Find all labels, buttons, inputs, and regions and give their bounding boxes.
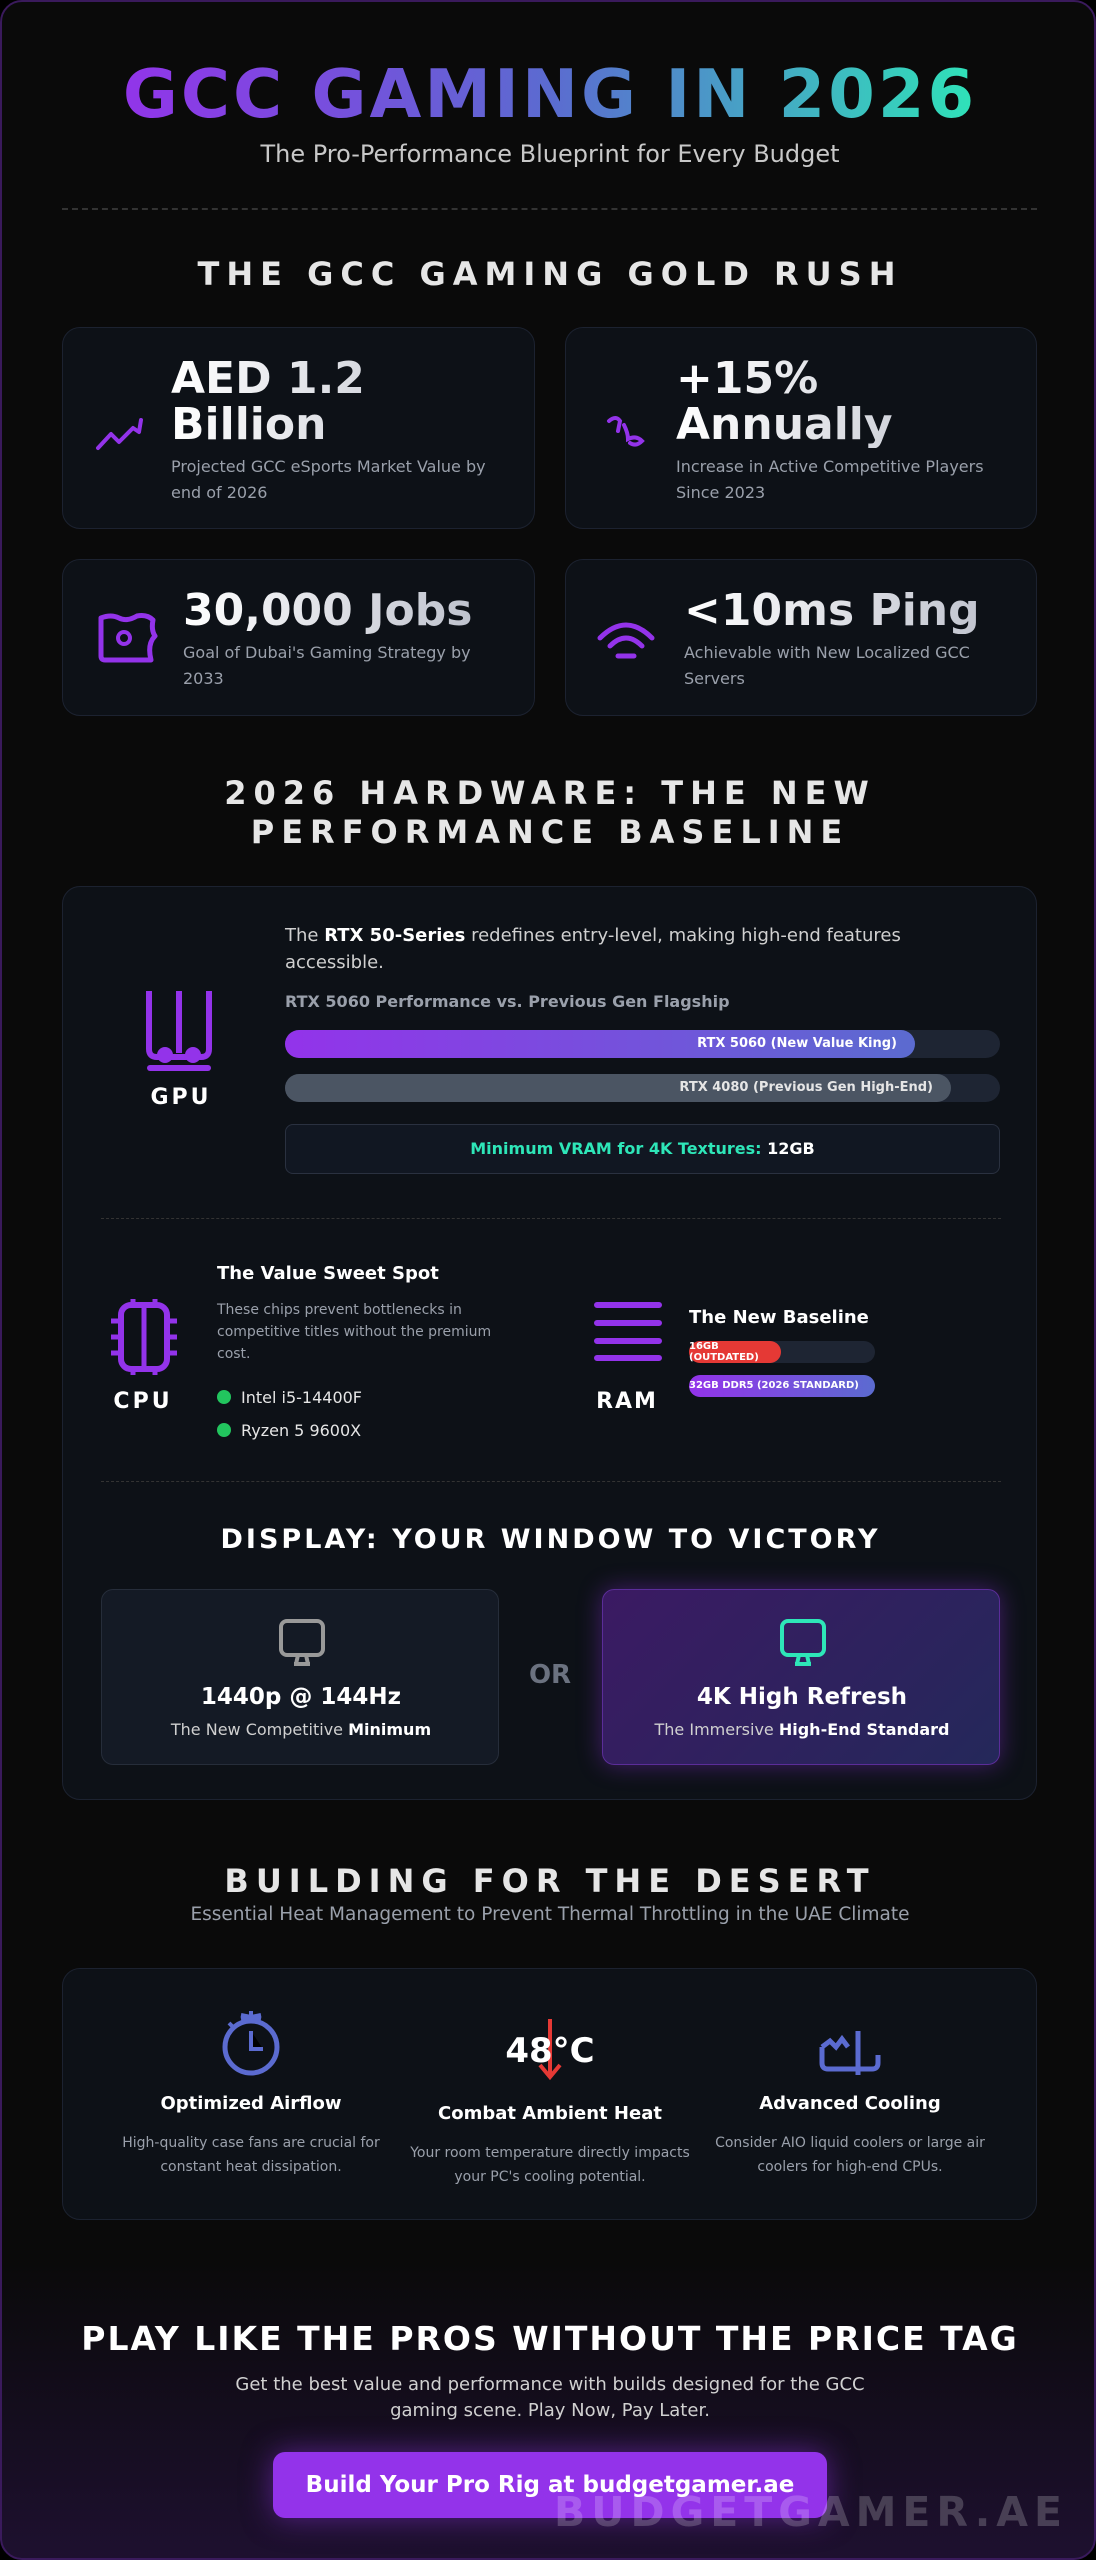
intro text: The RTX 50-Series redefines entry-level, making high-end features accessible. <box>285 925 901 973</box>
stat text: Achievable with New Localized GCC Servers <box>684 643 970 688</box>
stat text: Increase in Active Competitive Players Since 2023 <box>676 457 984 502</box>
CTA text: Get the best value and performance with builds designed for the GCC gaming scene. Play Now, Pay Later. <box>235 2374 865 2421</box>
stat text: Goal of Dubai's Gaming Strategy by 2033 <box>183 643 471 688</box>
display card: 1440p: 1440p @ 144Hz <box>201 1684 401 1710</box>
stat card: jobs <box>62 559 535 716</box>
cpu title: The Value Sweet Spot <box>217 1263 439 1284</box>
stat text <box>684 585 980 688</box>
bar chart <box>285 1030 1000 1102</box>
icon: trend <box>96 418 143 450</box>
subtitle: desert: Essential Heat Management to Prevent Thermal Throttling in the UAE Climate <box>190 1904 910 1925</box>
icon: wifi <box>598 622 654 658</box>
heading: gold rush: THE GCC GAMING GOLD RUSH <box>198 255 902 293</box>
icon: timer fan <box>222 2011 280 2076</box>
display card: 4K <box>602 1589 1000 1765</box>
RAM block <box>594 1302 875 1414</box>
icon: monitor <box>279 1619 325 1666</box>
icon: map <box>98 613 158 662</box>
icon: monitor teal <box>780 1619 826 1666</box>
bar chart: RTX 5060 (New Value King) <box>697 1036 897 1051</box>
stat card: market value <box>62 327 535 529</box>
col: airflow: High-quality case fans are crucial for constant heat dissipation. <box>122 2135 380 2175</box>
icon: growth <box>606 416 645 447</box>
display card: 1440p: The New Competitive Minimum <box>171 1720 431 1739</box>
col: cooling: Advanced Cooling <box>759 2093 941 2114</box>
cpu list: Intel i5-14400F <box>241 1388 362 1407</box>
ram bars: 32GB DDR5 (2026 STANDARD) <box>689 1380 859 1391</box>
icon: gpu <box>146 991 212 1071</box>
panel: cooling <box>62 1968 1037 2220</box>
ram bars: 16GB <box>689 1341 719 1352</box>
label RAM: RAM <box>596 1389 658 1414</box>
stat text: Projected GCC eSports Market Value by end of 2026 <box>171 457 486 502</box>
col: ambient <box>410 2019 690 2185</box>
display card: 4K: The Immersive High-End Standard <box>654 1720 950 1739</box>
col: airflow: Optimized Airflow <box>160 2093 342 2114</box>
ram bars: (OUTDATED) <box>689 1352 759 1363</box>
cpu list: Ryzen 5 9600X <box>241 1421 361 1440</box>
heading: hardware: PERFORMANCE BASELINE <box>251 813 849 851</box>
CTA heading: PLAY LIKE THE PROS WITHOUT THE PRICE TAG <box>81 2319 1019 2358</box>
icon: ram <box>594 1302 662 1361</box>
icon: liquid cooler <box>820 2031 880 2075</box>
heading: hardware: 2026 HARDWARE: THE NEW <box>224 774 876 812</box>
CTA button: Build Your Pro Rig at budgetgamer.ae <box>306 2472 794 2498</box>
col: ambient: Your room temperature directly impacts your PC's cooling potential. <box>410 2145 690 2185</box>
heading: hardware <box>224 774 876 851</box>
ram bars <box>689 1341 875 1397</box>
stat text: <10ms Ping <box>684 585 980 636</box>
stat card: players <box>565 327 1037 529</box>
stat text: Billion <box>171 399 326 450</box>
heading: display: DISPLAY: YOUR WINDOW TO VICTORY <box>220 1524 880 1555</box>
stat card: ping <box>565 559 1037 716</box>
col: airflow <box>122 2011 380 2175</box>
panel: hardware <box>62 886 1037 1800</box>
display card: 1440p <box>101 1589 499 1765</box>
chart subheading: RTX 5060 Performance vs. Previous Gen Flagship <box>285 992 730 1011</box>
CTA button <box>273 2452 827 2518</box>
VRAM callout: Minimum VRAM for 4K Textures: 12GB <box>470 1139 815 1158</box>
subtitle: The Pro-Performance Blueprint for Every Budget <box>260 140 840 168</box>
icon: cpu <box>111 1299 177 1375</box>
stat text <box>183 585 472 688</box>
cpu list <box>217 1388 362 1440</box>
stat text: 30,000 Jobs <box>183 585 472 636</box>
stat text <box>171 353 486 502</box>
ram title: The New Baseline <box>689 1307 869 1328</box>
col: cooling: Consider AIO liquid coolers or large air coolers for high-end CPUs. <box>715 2135 985 2175</box>
col: cooling <box>715 2031 985 2175</box>
label CPU: CPU <box>113 1389 173 1414</box>
stat text: AED 1.2 <box>171 353 365 404</box>
bar chart: RTX 4080 (Previous Gen High-End) <box>679 1080 933 1095</box>
icon: temperature arrow <box>505 2019 595 2080</box>
OR label: OR <box>529 1660 571 1690</box>
stat text: Annually <box>676 399 893 450</box>
title: GCC GAMING IN 2026 <box>123 55 977 133</box>
CPU block <box>111 1263 491 1440</box>
label GPU: GPU <box>150 1085 212 1110</box>
col: ambient: Combat Ambient Heat <box>438 2103 662 2124</box>
cpu desc: These chips prevent bottlenecks in competitive titles without the premium cost. <box>217 1302 491 1362</box>
icon: temperature arrow: 48°C <box>505 2031 595 2071</box>
VRAM callout <box>285 1124 1000 1174</box>
stat text <box>676 353 984 502</box>
watermark: BUDGETGAMER.AE <box>554 2488 1068 2536</box>
GPU block <box>146 925 1000 1174</box>
heading: desert: BUILDING FOR THE DESERT <box>224 1862 876 1900</box>
stat text: +15% <box>676 353 818 404</box>
display card: 4K: 4K High Refresh <box>697 1684 907 1710</box>
